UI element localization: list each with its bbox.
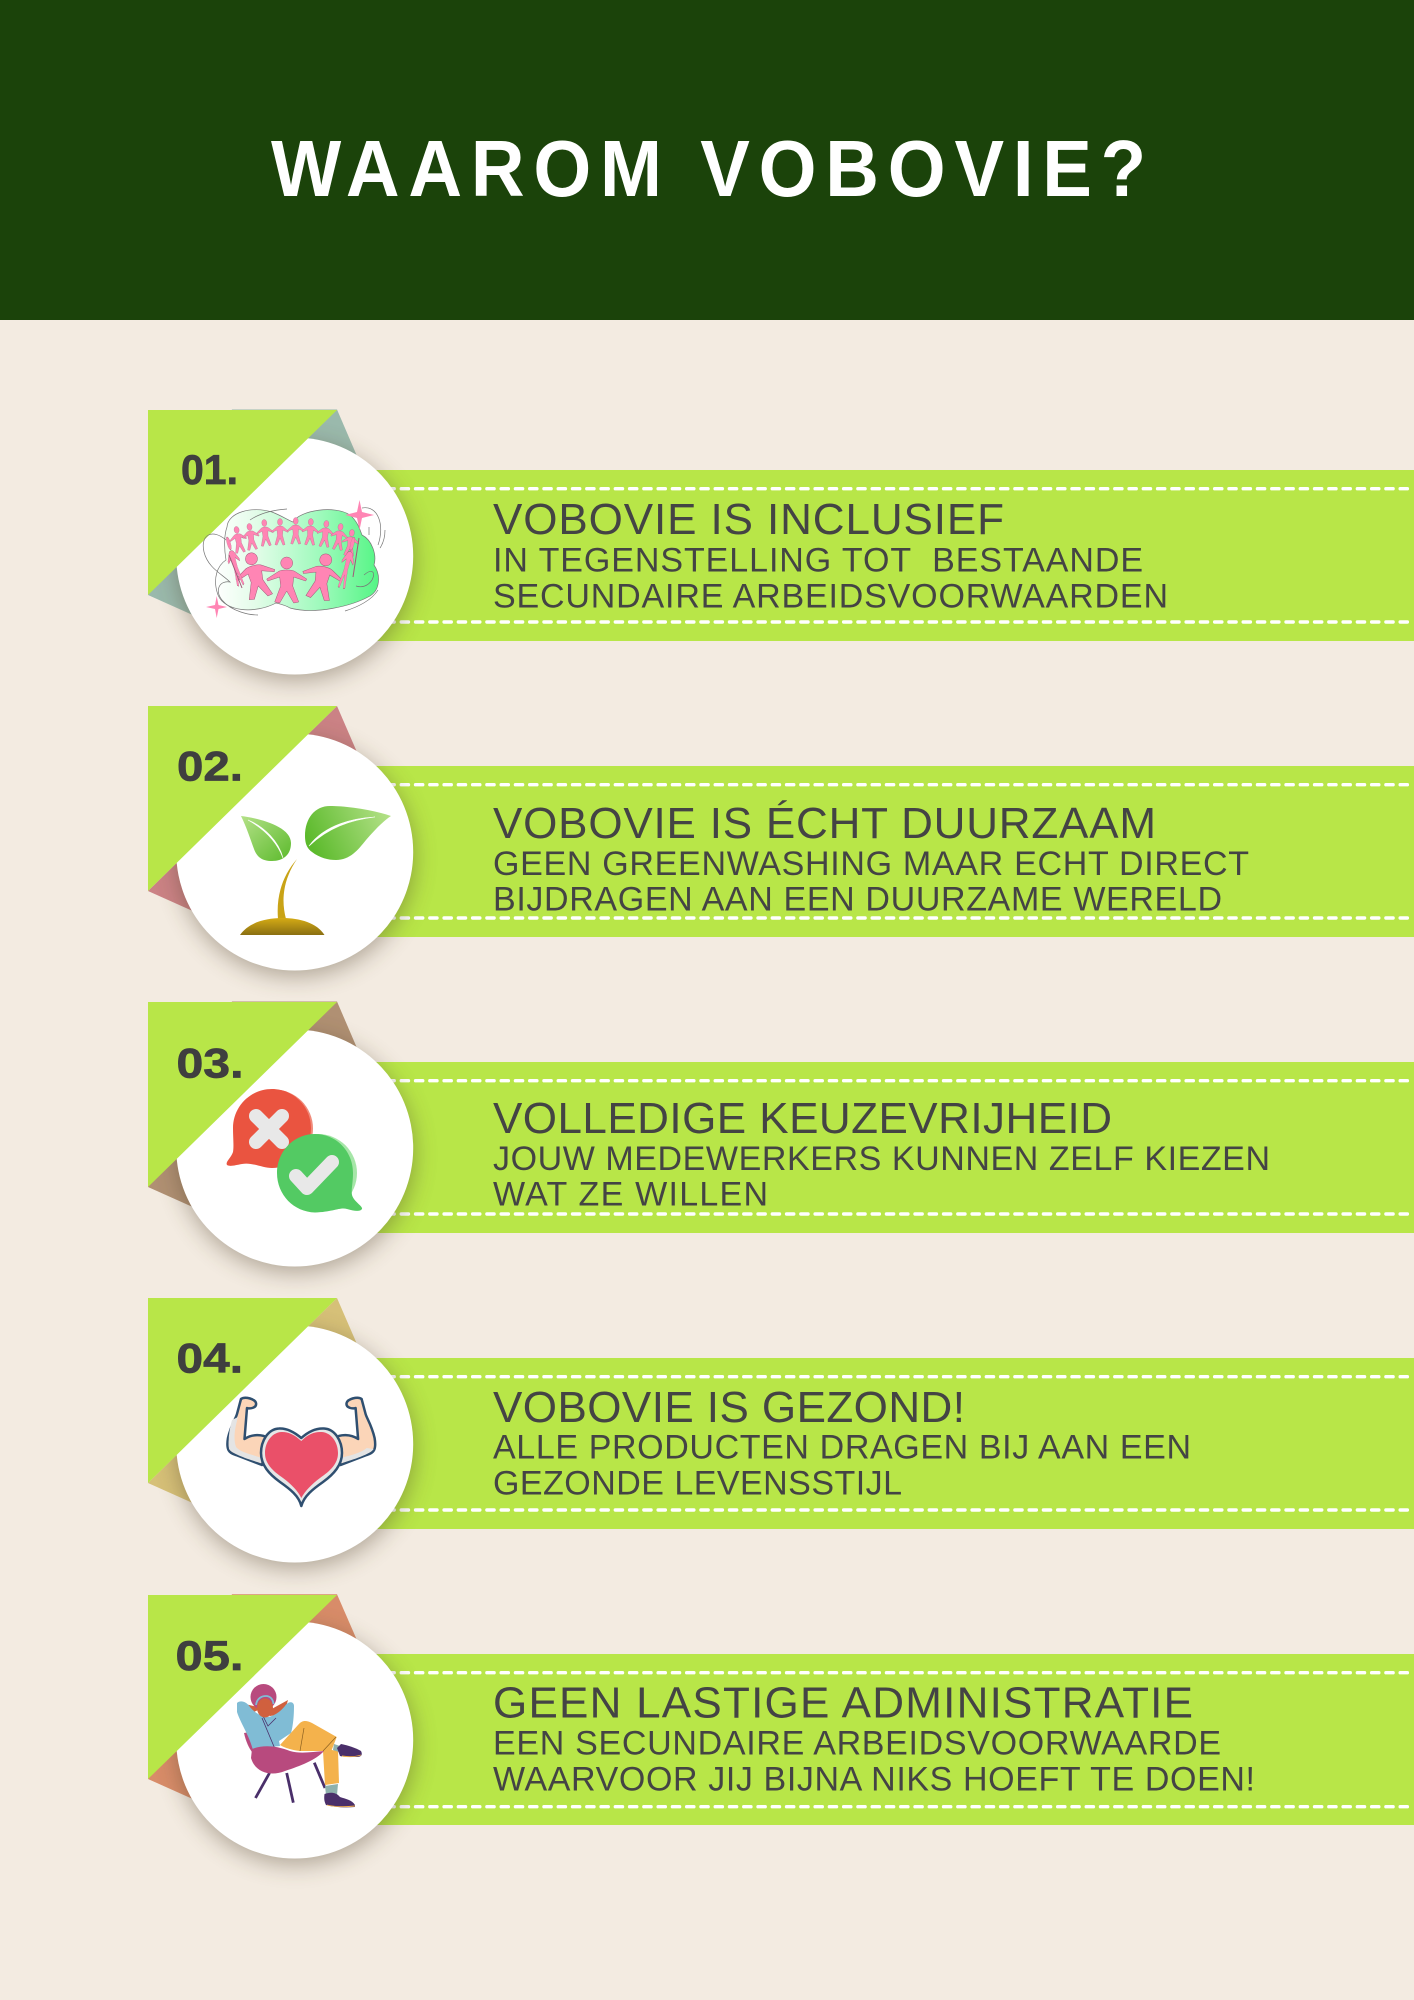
text block 04: ALLE PRODUCTEN DRAGEN BIJ AAN EEN xyxy=(493,1429,1191,1467)
ribbon 05 xyxy=(370,1654,1414,1825)
corner triangle 01 xyxy=(148,410,337,595)
ribbon 04 xyxy=(370,1358,1414,1529)
circle shadow 05 xyxy=(178,1628,414,1864)
text block 02: BIJDRAGEN AAN EEN DUURZAME WERELD xyxy=(493,881,1222,919)
text block 04: GEZONDE LEVENSSTIJL xyxy=(493,1465,902,1503)
title: WAAROM VOBOVIE? xyxy=(271,125,1146,214)
corner triangle 02 xyxy=(148,706,337,891)
text block 01: IN TEGENSTELLING TOT BESTAANDE xyxy=(493,542,1143,580)
panel: reason 05 xyxy=(148,1594,1414,1864)
white circle 05 xyxy=(176,1622,413,1858)
text block 02: GEEN GREENWASHING MAAR ECHT DIRECT xyxy=(493,845,1249,883)
folded corners 04 xyxy=(148,1298,363,1513)
panel: reason 01 xyxy=(148,410,1414,680)
white circle 03 xyxy=(176,1030,413,1266)
icon: heart with flexing arms xyxy=(227,1398,375,1506)
corner triangle 03 xyxy=(148,1002,337,1187)
text block 04 xyxy=(493,1383,1191,1503)
number 01: 01. xyxy=(181,446,238,493)
ribbon 01 xyxy=(370,470,1414,641)
circle shadow 02 xyxy=(178,740,414,976)
icon: circle of people xyxy=(203,500,385,618)
text block 05 xyxy=(493,1679,1255,1799)
folded corners 03 xyxy=(148,1002,363,1217)
icon: relaxed person in chair xyxy=(237,1684,362,1807)
white circle 04 xyxy=(176,1326,413,1562)
circle shadow 01 xyxy=(178,444,414,680)
number 04: 04. xyxy=(176,1335,243,1382)
folded corners 05 xyxy=(148,1594,363,1809)
corner triangle 04 xyxy=(148,1298,337,1483)
icon: red cross and green check speech bubbles xyxy=(227,1089,362,1212)
white circle 01 xyxy=(176,438,413,674)
number 05: 05. xyxy=(176,1632,244,1679)
text block 05: GEEN LASTIGE ADMINISTRATIE xyxy=(493,1679,1193,1728)
text block 03: VOLLEDIGE KEUZEVRIJHEID xyxy=(493,1094,1112,1143)
icon: sprout xyxy=(240,806,391,935)
text block 05: WAARVOOR JIJ BIJNA NIKS HOEFT TE DOEN! xyxy=(493,1761,1255,1799)
ribbon 03 xyxy=(370,1062,1414,1233)
circle shadow 03 xyxy=(178,1036,414,1272)
panel: reason 03 xyxy=(148,1002,1414,1272)
text block 01: VOBOVIE IS INCLUSIEF xyxy=(493,495,1004,544)
text block 03: JOUW MEDEWERKERS KUNNEN ZELF KIEZEN xyxy=(493,1140,1270,1178)
header band xyxy=(0,0,1414,320)
text block 01 xyxy=(493,495,1168,616)
text block 01: SECUNDAIRE ARBEIDSVOORWAARDEN xyxy=(493,578,1168,616)
text block 04: VOBOVIE IS GEZOND! xyxy=(493,1383,965,1432)
white circle 02 xyxy=(176,734,413,970)
text block 02 xyxy=(493,799,1249,919)
number 02: 02. xyxy=(177,743,243,790)
number 03: 03. xyxy=(176,1040,244,1087)
folded corners 01 xyxy=(148,410,363,625)
circle shadow 04 xyxy=(178,1332,414,1568)
text block 03 xyxy=(493,1094,1270,1214)
ribbon 02 xyxy=(370,766,1414,937)
panel: reason 02 xyxy=(148,706,1414,976)
text block 02: VOBOVIE IS ÉCHT DUURZAAM xyxy=(493,799,1156,848)
panel: reason 04 xyxy=(148,1298,1414,1568)
corner triangle 05 xyxy=(148,1595,337,1779)
folded corners 02 xyxy=(148,706,363,921)
text block 05: EEN SECUNDAIRE ARBEIDSVOORWAARDE xyxy=(493,1724,1221,1762)
text block 03: WAT ZE WILLEN xyxy=(493,1176,768,1214)
